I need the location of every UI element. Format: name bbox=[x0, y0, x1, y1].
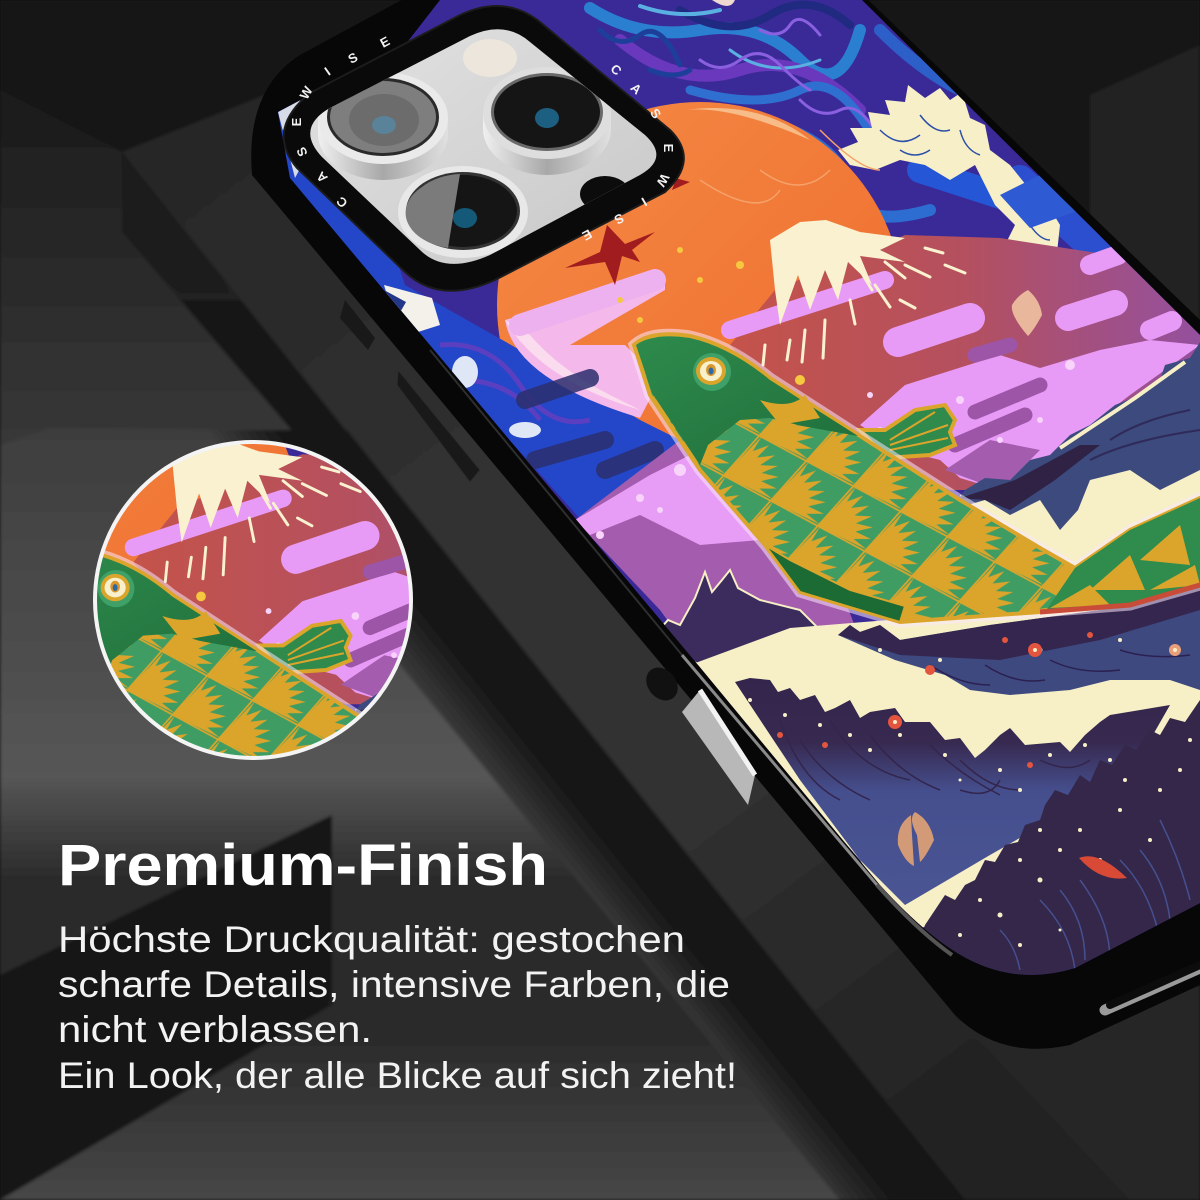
description text: Ein Look, der alle Blicke auf sich zieht! bbox=[58, 1055, 737, 1096]
volume button bbox=[397, 370, 480, 482]
action button bbox=[340, 300, 375, 350]
CASEWISE ring lettering: W bbox=[297, 83, 316, 102]
lidar bbox=[580, 176, 625, 204]
phone artwork bbox=[270, 0, 1200, 985]
lower step and floor bbox=[0, 428, 840, 1200]
lower step front bbox=[0, 815, 332, 1200]
phone case body bbox=[251, 0, 1200, 1049]
charging port bbox=[1105, 968, 1200, 1010]
description text: nicht verblassen. bbox=[58, 1009, 372, 1050]
CASEWISE ring lettering: S bbox=[647, 106, 665, 122]
title: Premium-Finish bbox=[58, 833, 548, 898]
CASEWISE ring lettering: E bbox=[289, 117, 304, 126]
CASEWISE ring lettering: E bbox=[579, 226, 594, 244]
camera glass bbox=[310, 29, 656, 264]
lens three bbox=[398, 166, 528, 258]
CASEWISE ring lettering: A bbox=[628, 80, 645, 98]
CASEWISE ring lettering: C bbox=[608, 61, 625, 79]
CASEWISE ring lettering: I bbox=[639, 194, 650, 209]
left upper wall bbox=[0, 90, 300, 445]
camera ring bbox=[284, 6, 684, 291]
description text: scharfe Details, intensive Farben, die bbox=[58, 964, 730, 1005]
magnified inset circle bbox=[93, 440, 413, 760]
dark diagonal band bbox=[207, 430, 965, 1200]
CASEWISE ring lettering bbox=[289, 33, 676, 244]
CASEWISE ring lettering: S bbox=[293, 145, 311, 159]
lens two bbox=[483, 67, 611, 175]
CASEWISE ring lettering: E bbox=[661, 144, 676, 153]
CASEWISE ring lettering: S bbox=[346, 49, 361, 67]
description text bbox=[58, 919, 737, 1096]
CASEWISE ring lettering: W bbox=[653, 171, 672, 190]
side glare bbox=[682, 655, 877, 885]
CASEWISE ring lettering: E bbox=[378, 33, 393, 51]
flash bbox=[463, 39, 517, 77]
camera module bbox=[284, 6, 684, 291]
side silver button bbox=[682, 690, 755, 805]
lens one bbox=[318, 72, 448, 180]
CASEWISE ring lettering: S bbox=[611, 210, 626, 228]
CASEWISE ring lettering: A bbox=[313, 168, 330, 186]
CASEWISE ring lettering: C bbox=[333, 193, 350, 211]
top right block bbox=[1090, 45, 1200, 330]
description text: Höchste Druckqualität: gestochen bbox=[58, 919, 685, 960]
CASEWISE ring lettering: I bbox=[322, 64, 333, 78]
